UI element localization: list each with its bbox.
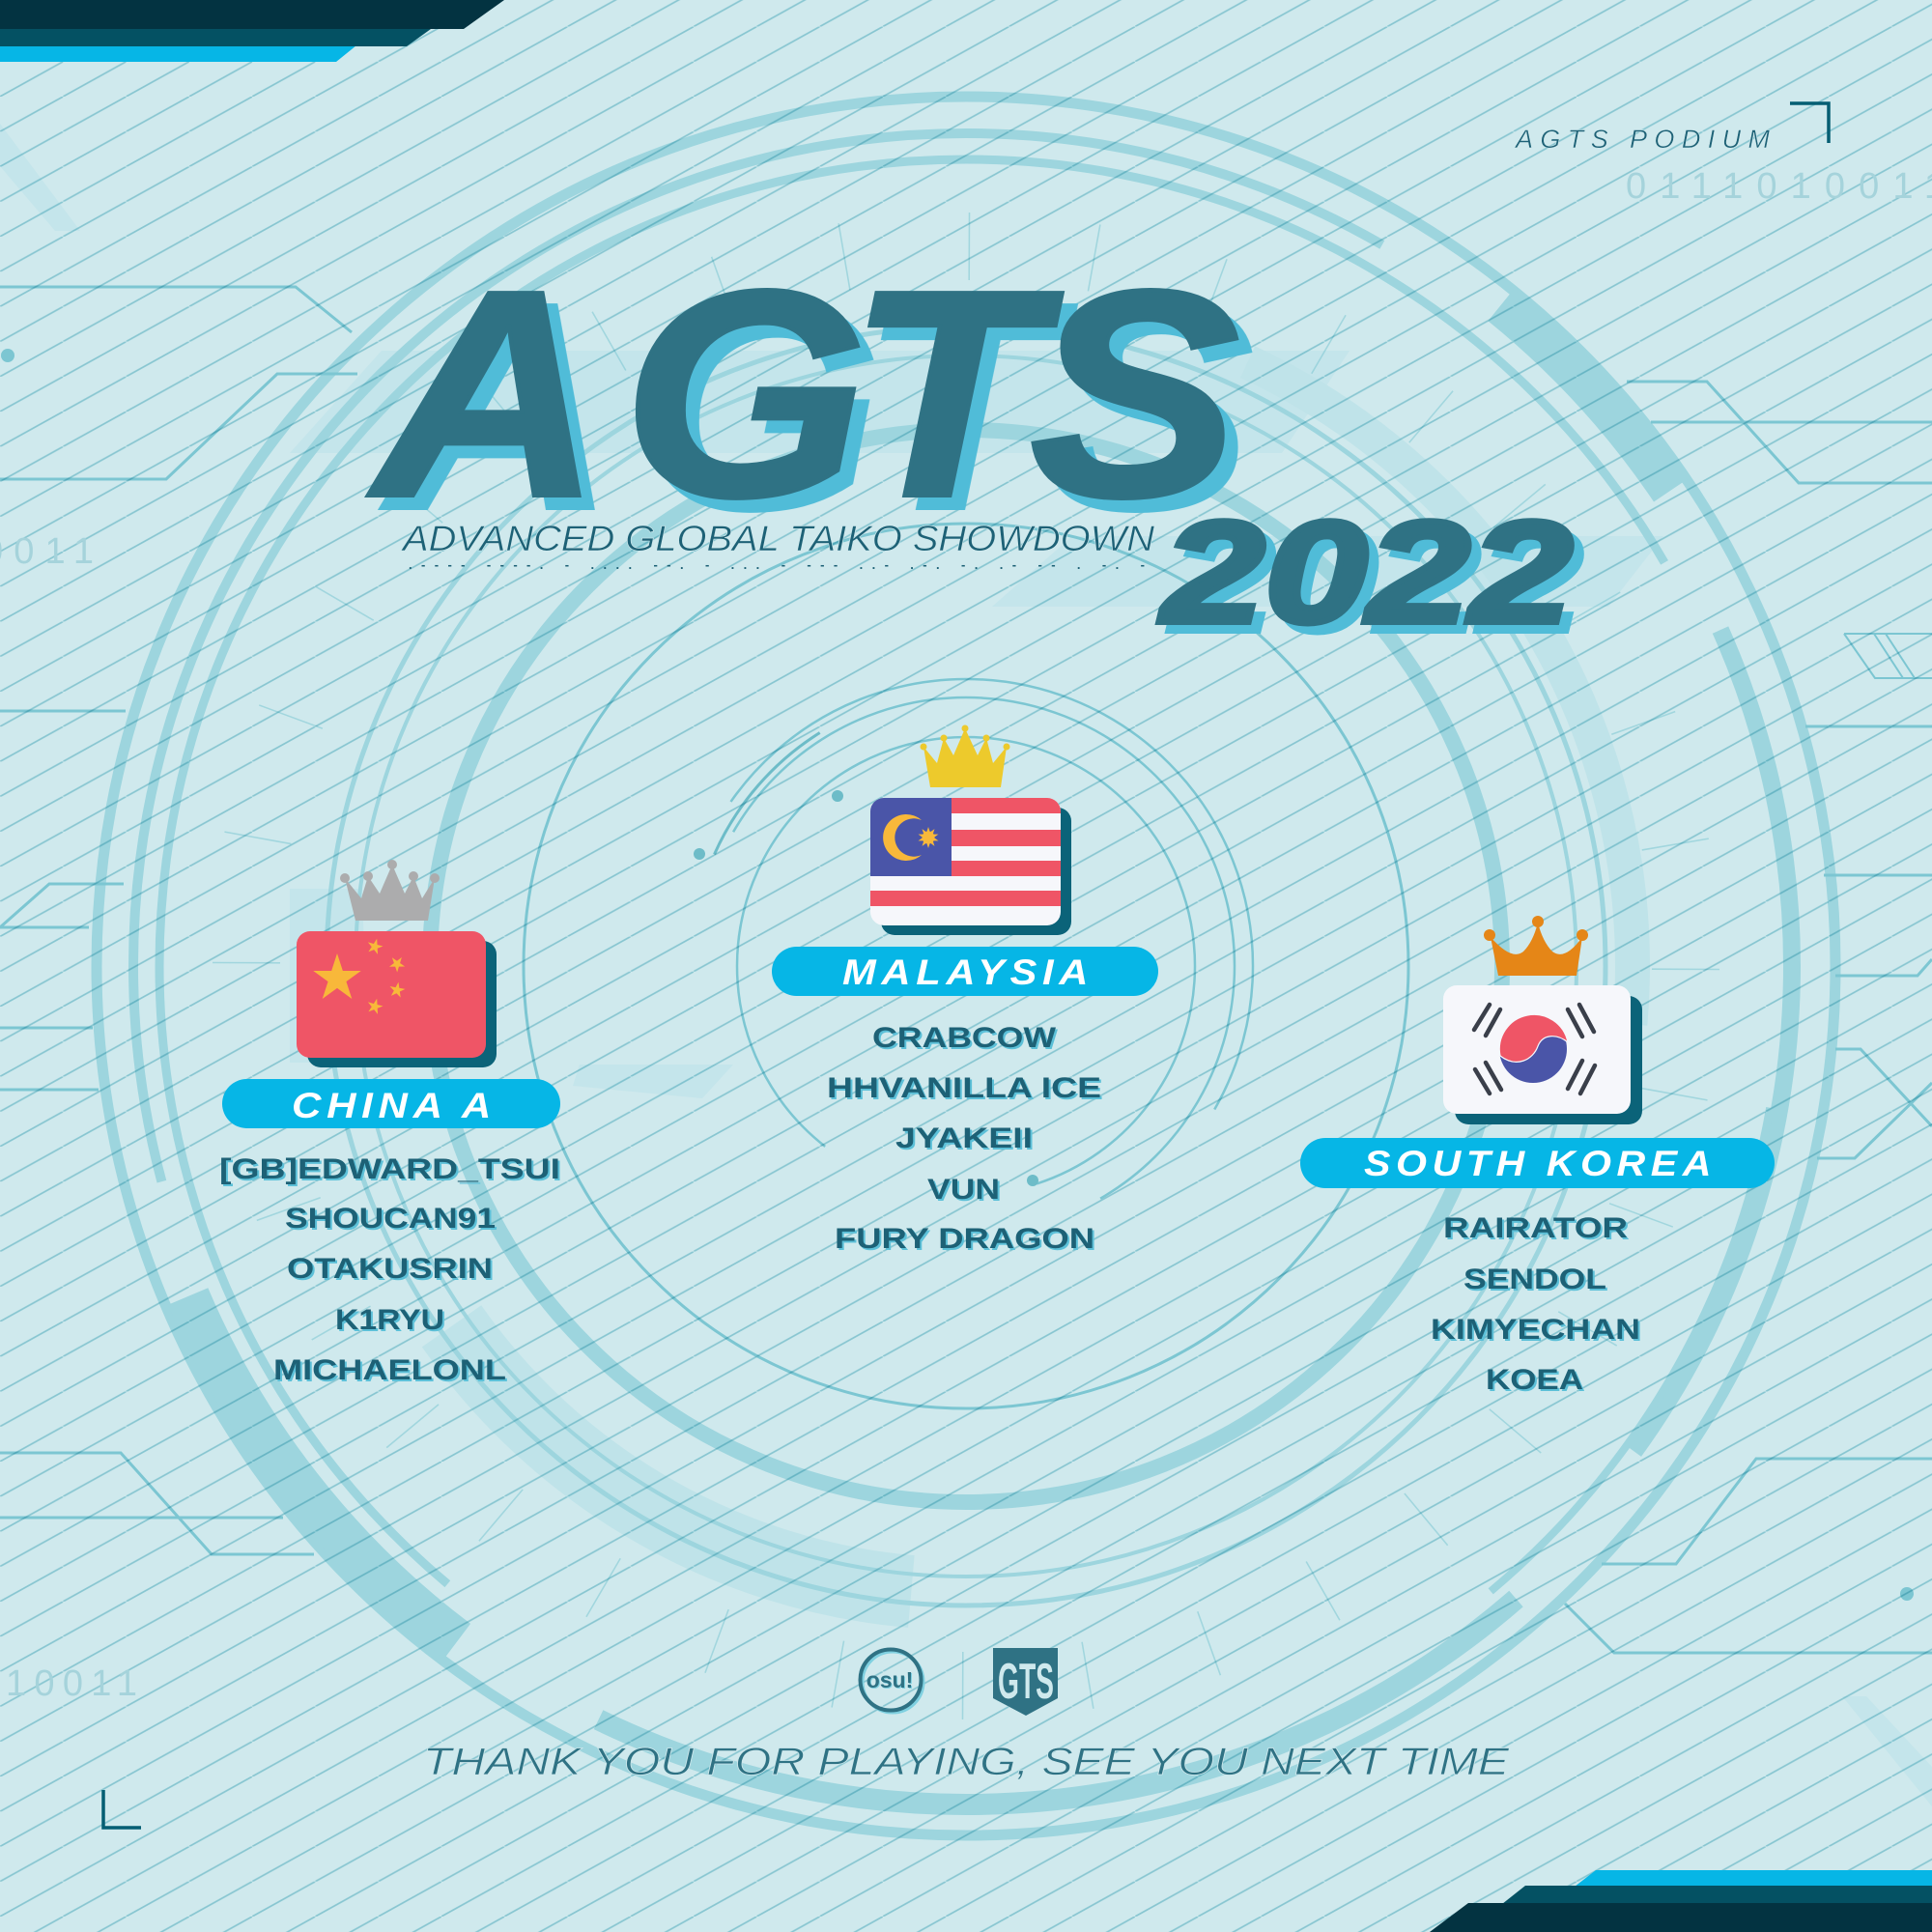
closing message: THANK YOU FOR PLAYING, SEE YOU NEXT TIME: [423, 1741, 1511, 1783]
icon: Korea flag: [1443, 985, 1642, 1124]
player list: [1431, 1212, 1640, 1396]
team label: [1300, 1138, 1775, 1188]
player list: SHOUCAN91: [285, 1203, 496, 1235]
player list: SENDOL: [1463, 1264, 1606, 1295]
panel: China A: [219, 860, 560, 1386]
subtitle: ADVANCED GLOBAL TAIKO SHOWDOWN: [401, 519, 1154, 558]
logo: osu: osu!: [867, 1667, 913, 1692]
morse line: .---- ----. - .... --. - ... - --- ..- .-. -. .- -- . -. -: [409, 557, 1145, 572]
team label: MALAYSIA: [842, 952, 1094, 992]
player list: RAIRATOR: [1443, 1212, 1628, 1244]
icon: gold crown: [920, 724, 1010, 787]
team label: SOUTH KOREA: [1364, 1144, 1717, 1183]
player list: [219, 1153, 560, 1386]
logo: osu: [860, 1650, 922, 1710]
team label: [772, 947, 1158, 996]
bottom-right corner bars: [1430, 1870, 1932, 1932]
player list: [827, 1022, 1101, 1255]
team label: [222, 1079, 560, 1128]
player list: OTAKUSRIN: [287, 1253, 493, 1285]
player list: JYAKEII: [895, 1122, 1033, 1154]
icon: bronze crown: [1484, 916, 1588, 976]
player list: FURY DRAGON: [835, 1223, 1094, 1255]
player list: KIMYECHAN: [1431, 1314, 1640, 1346]
player list: VUN: [927, 1174, 1000, 1206]
player list: HHVANILLA ICE: [827, 1072, 1101, 1104]
top-left corner bars: [0, 0, 504, 62]
team label: CHINA A: [292, 1086, 497, 1125]
header label: AGTS PODIUM: [1514, 125, 1770, 154]
circuit traces: [0, 287, 1932, 1653]
title: 2022: 2022: [1158, 491, 1573, 653]
player list: KOEA: [1486, 1364, 1583, 1396]
player list: MICHAELONL: [273, 1354, 506, 1386]
corner bracket top right: [1790, 103, 1829, 143]
player list: CRABCOW: [872, 1022, 1057, 1054]
logo: GTS shield: GTS: [998, 1653, 1054, 1709]
player list: K1RYU: [335, 1304, 444, 1336]
icon: silver crown: [340, 860, 440, 921]
panel: South Korea: [1300, 916, 1775, 1396]
title: AGTS: AGTS: [364, 229, 1241, 558]
corner bracket bottom left: [103, 1790, 141, 1828]
icon: Malaysia flag: [870, 798, 1071, 935]
panel: Malaysia: [772, 724, 1158, 1255]
icon: China flag: [297, 931, 497, 1067]
binary text bottom left: 10011: [6, 1663, 137, 1704]
logo: GTS shield: [993, 1648, 1058, 1716]
player list: [GB]EDWARD_TSUI: [219, 1153, 560, 1185]
